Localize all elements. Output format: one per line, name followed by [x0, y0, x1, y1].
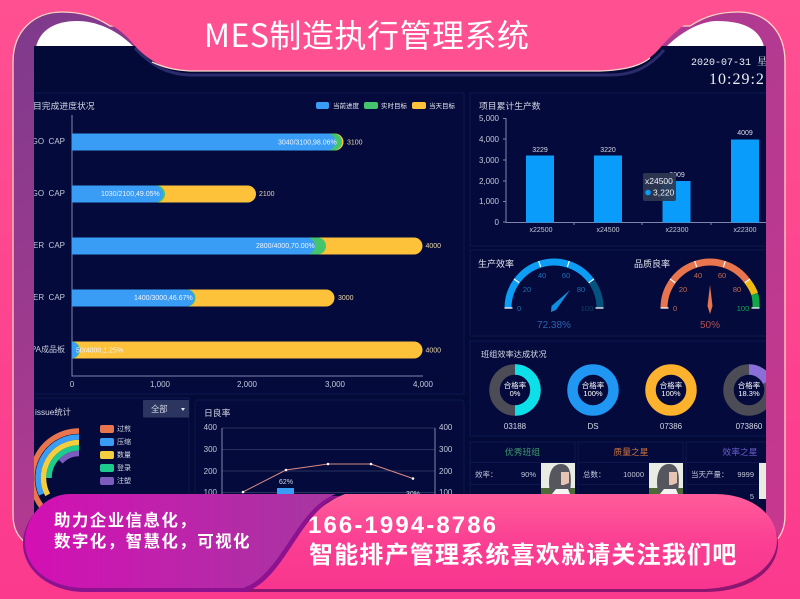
donut: DS: 100% [583, 389, 603, 398]
bottom banner: slogan: 数字化，智慧化，可视化 [54, 531, 251, 551]
header ribbon highlight [152, 58, 650, 71]
panel heading: team efficiency: 班组效率达成状况 [481, 349, 547, 359]
bar row 5: PA成品板 [31, 344, 65, 354]
tooltip: x24500 [645, 176, 673, 186]
white screen top: left [36, 21, 134, 47]
radial bar chart [32, 431, 79, 508]
legend: 实时目标 [381, 101, 408, 110]
gauge: production efficiency: 100 [581, 304, 593, 313]
column chart: 0 [495, 218, 500, 227]
column chart: 5,000 [479, 114, 500, 123]
gauge: quality yield: 60 [718, 271, 726, 280]
donut: 07386: 100% [661, 389, 681, 398]
photo [759, 463, 766, 499]
combo chart: 400 [439, 423, 453, 432]
panel: team efficiency [470, 341, 780, 436]
date and time: 10:29:2 [709, 71, 765, 88]
date and time: 2020-07-31 星 [691, 56, 767, 69]
gauge: quality yield: 80 [733, 285, 741, 294]
photo [649, 463, 683, 494]
bar row 3 [27, 238, 441, 254]
bar row 4: 3000 [338, 295, 354, 302]
tooltip: 3,220 [653, 188, 675, 198]
photo [541, 463, 575, 494]
panel: cumulative production [470, 93, 780, 246]
call to action: 智能排产管理系统喜欢就请关注我们吧 [309, 542, 737, 569]
gauge: quality yield: 100 [737, 304, 749, 313]
column chart: x22500 [530, 227, 553, 234]
bar row 5: 4000 [426, 348, 441, 354]
bar row 3: 2800/4000,70.00% [256, 243, 315, 250]
gauge: production efficiency: 20 [523, 285, 531, 294]
bar row 2: 2100 [259, 191, 275, 198]
panel heading: progress: 目完成进度状况 [33, 100, 95, 111]
donut: 073860: 18.3% [738, 389, 760, 398]
card: efficiency star: 5 [750, 492, 754, 501]
issue legend: 过煎 [117, 424, 131, 433]
bar row 3: 4000 [426, 243, 441, 250]
column chart [479, 114, 770, 234]
gauge: quality yield: 0 [673, 304, 677, 313]
bar row 2: GO CAP [32, 189, 65, 198]
donut: 073860: 073860 [736, 422, 763, 431]
card: excellent team: 优秀班组 [505, 446, 540, 457]
panel: gauges [470, 250, 780, 336]
header ribbon [0, 0, 800, 71]
dashboard screen [20, 46, 780, 546]
legend: 当天目标 [429, 101, 456, 110]
panel heading: cumulative production: 项目累计生产数 [479, 100, 541, 111]
phone number: 166-1994-8786 [308, 512, 498, 539]
column chart: 1,000 [479, 197, 500, 206]
bar row 1 [32, 134, 363, 150]
combo chart: 300 [439, 445, 453, 454]
bar row 2: 1030/2100,49.05% [101, 191, 160, 198]
combo chart: 100 [439, 488, 453, 497]
bar row 5: 50/4000,1.25% [76, 348, 123, 354]
combo chart: 200 [439, 467, 453, 476]
card: excellent team: 效率： [475, 469, 498, 479]
slogan text: 助力企业信息化， [54, 510, 197, 530]
horizontal bar chart: 2,000 [237, 380, 258, 389]
bar row 2 [32, 186, 275, 202]
dropdown [143, 400, 189, 418]
gauge: quality yield: 50% [700, 320, 720, 331]
bar row 3: NER CAP [27, 241, 65, 250]
column chart: 4,000 [479, 135, 500, 144]
combo chart: 30% [406, 491, 420, 498]
card: efficiency star: 9999 [737, 470, 754, 479]
column chart: x24500 [597, 227, 620, 234]
title: MES制造执行管理系统 [204, 11, 529, 57]
horizontal bar chart: 3,000 [325, 380, 346, 389]
donut: 03188: 03188 [504, 422, 527, 431]
gauge: quality yield: 40 [694, 271, 702, 280]
panel: project progress [20, 93, 464, 394]
donut: 07386: 07386 [660, 422, 683, 431]
horizontal bar chart: 4,000 [413, 380, 434, 389]
donut: DS [572, 370, 614, 431]
donut: 03188: 合格率 [504, 380, 527, 390]
issue legend: 压缩 [117, 437, 131, 446]
horizontal bar chart: 0 [70, 380, 75, 389]
card: quality star: 10000 [623, 470, 644, 479]
combo chart: 62% [279, 479, 293, 486]
gauge: production efficiency: 60 [562, 271, 570, 280]
column chart: 3,000 [479, 156, 500, 165]
gauge: production efficiency: 72.38% [537, 320, 571, 331]
combo chart: 200 [204, 467, 218, 476]
gauge: production efficiency [478, 258, 604, 331]
column chart: x22300 [734, 227, 757, 234]
card: quality star: 质量之星 [613, 446, 649, 457]
donut: 03188: 0% [510, 389, 521, 398]
bar row 1: GO CAP [32, 137, 65, 146]
column chart: 2,000 [479, 177, 500, 186]
bar row 1: 3040/3100,98.06% [278, 140, 337, 146]
donut: DS: DS [587, 422, 599, 431]
legend [316, 102, 455, 109]
donut: 07386: 合格率 [660, 380, 683, 390]
issue legend: 数量 [117, 450, 131, 459]
card: efficiency star [686, 442, 776, 512]
bar row 4: NER CAP [27, 293, 65, 302]
card: excellent team [470, 442, 576, 494]
gauge: quality yield [634, 258, 760, 331]
combo chart: 300 [204, 445, 218, 454]
donut: DS: 合格率 [582, 380, 605, 390]
gauge: production efficiency: 生产效率 [478, 258, 514, 269]
panel heading: daily yield: 日良率 [204, 407, 231, 418]
column chart: 4009 [737, 130, 753, 137]
combo chart [204, 424, 452, 494]
legend: 当前进度 [333, 101, 360, 110]
donut: 073860 [728, 370, 770, 431]
column chart: 3229 [532, 147, 548, 154]
card: efficiency star: 当天产量： [691, 469, 728, 479]
bottom banner: contact [243, 494, 778, 592]
card: efficiency star: 效率之星 [722, 446, 758, 457]
date and time [692, 56, 766, 84]
panel: daily yield [194, 400, 464, 494]
bottom banner: slogan [23, 494, 340, 592]
issue legend [100, 424, 131, 485]
donut: 07386 [650, 370, 692, 431]
panel heading: issue: issue统计 [35, 407, 71, 417]
horizontal bar chart: 1,000 [150, 380, 171, 389]
column chart: x22300 [666, 227, 689, 234]
gauge: production efficiency: 0 [517, 304, 521, 313]
combo chart: 400 [204, 423, 218, 432]
issue legend: 注塑 [117, 476, 131, 485]
bar row 5 [31, 342, 441, 358]
card: quality star [578, 442, 684, 494]
column chart: 2009 [669, 172, 685, 179]
gauge: quality yield: 20 [679, 285, 687, 294]
bar row 4 [27, 290, 354, 306]
dropdown: 全部 [151, 404, 168, 414]
horizontal bar chart [27, 115, 441, 389]
donut: 073860: 合格率 [738, 380, 761, 390]
header ribbon shadow [135, 48, 664, 75]
card: quality star: 总数： [583, 469, 606, 479]
white screen top: right [666, 21, 764, 47]
gauge: production efficiency: 80 [577, 285, 585, 294]
gauge: production efficiency: 40 [538, 271, 546, 280]
column chart: 3220 [600, 147, 616, 154]
card: excellent team: 90% [521, 470, 536, 479]
panel: issue statistics [20, 398, 189, 508]
tooltip [643, 173, 676, 201]
gauge: quality yield: 品质良率 [634, 258, 670, 269]
combo chart: 100 [204, 488, 218, 497]
donut: 03188 [494, 370, 536, 431]
bar row 1: 3100 [347, 140, 363, 146]
issue legend: 登录 [117, 463, 131, 472]
bar row 4: 1400/3000,46.67% [134, 295, 193, 302]
